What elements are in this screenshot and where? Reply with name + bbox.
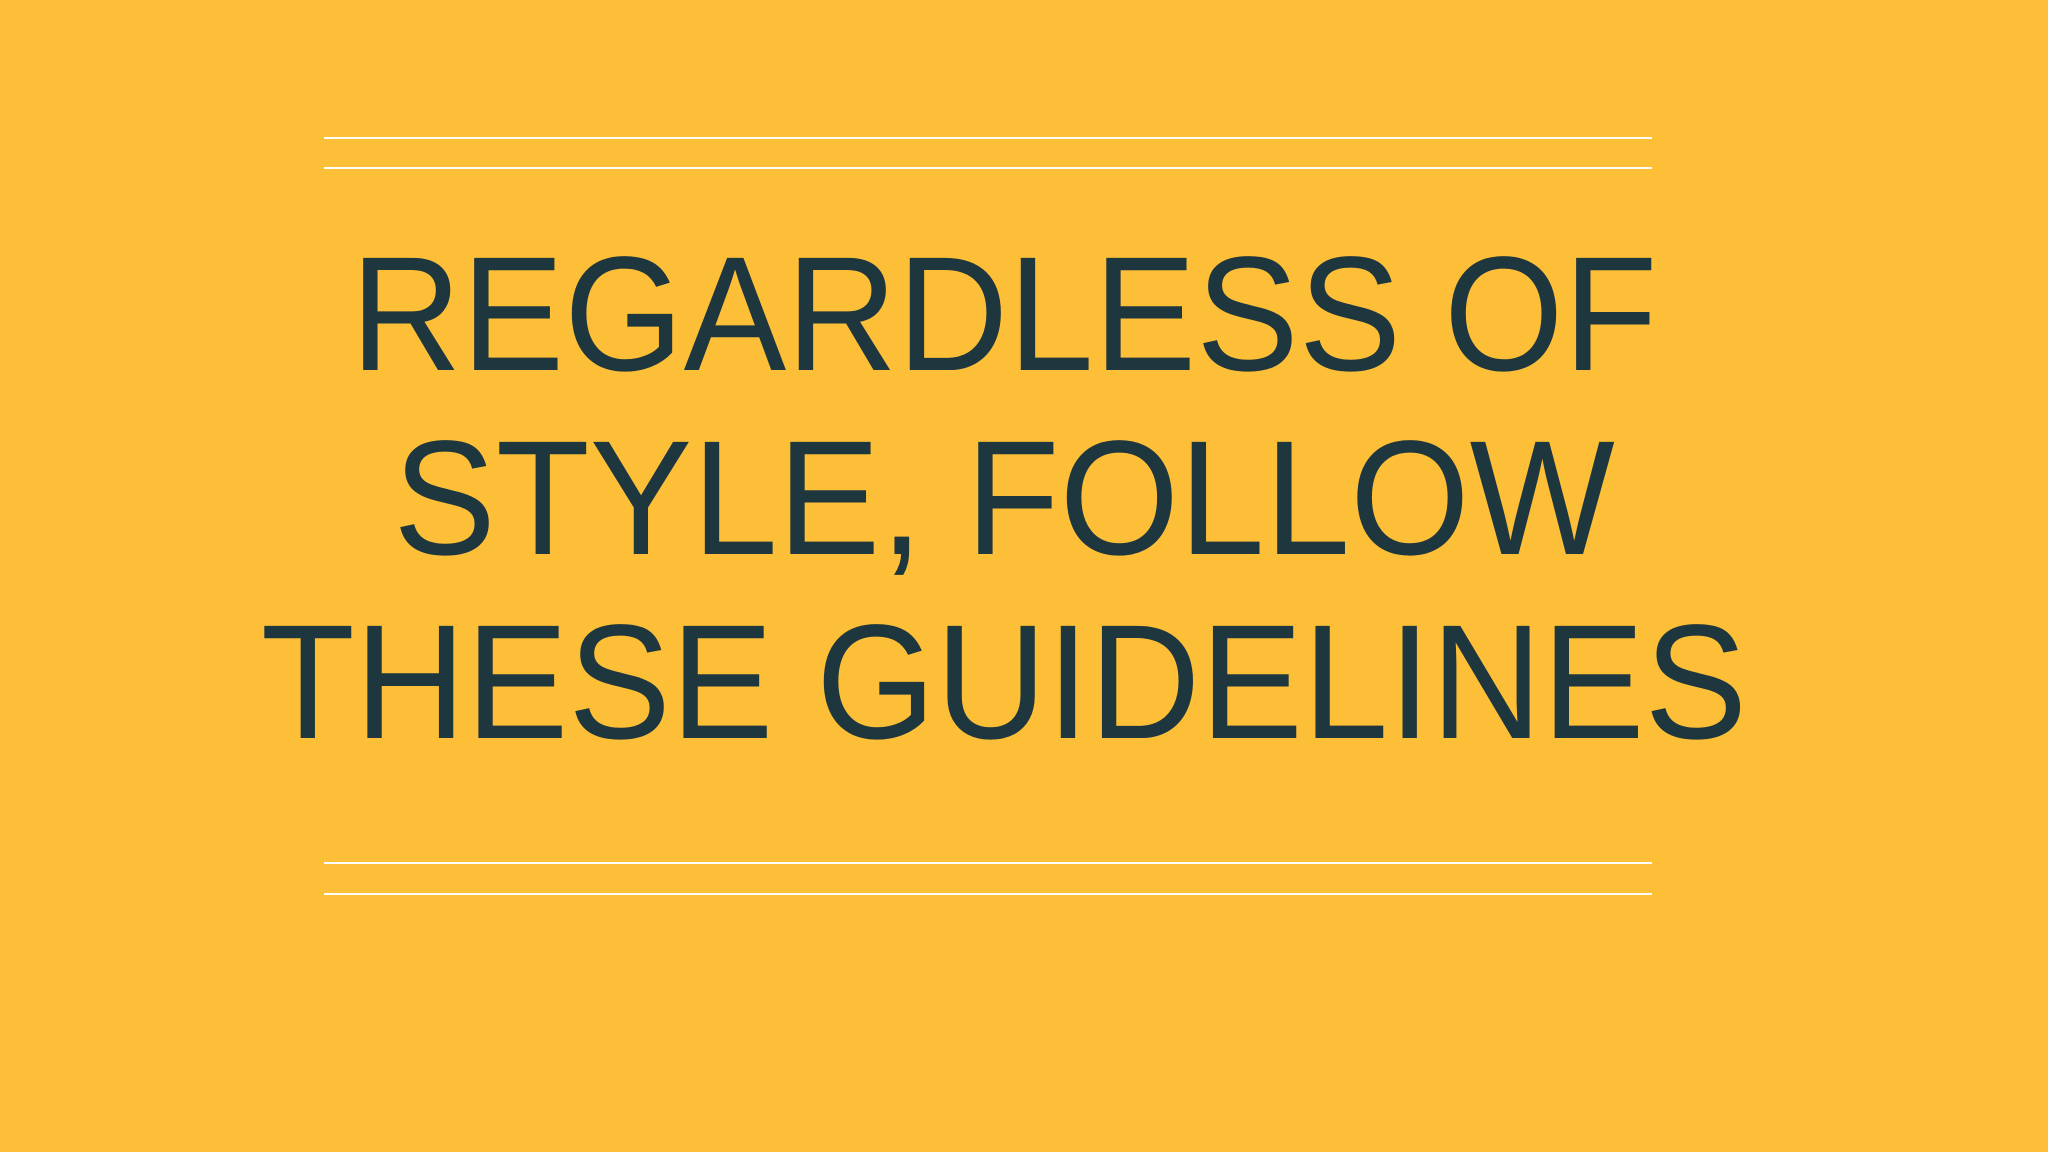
- top double rule: [324, 137, 1652, 169]
- title: REGARDLESS OF: [351, 222, 1657, 405]
- title: [261, 222, 1747, 773]
- bottom double rule: [324, 862, 1652, 895]
- title: STYLE, FOLLOW: [393, 406, 1615, 589]
- title: THESE GUIDELINES: [261, 590, 1747, 773]
